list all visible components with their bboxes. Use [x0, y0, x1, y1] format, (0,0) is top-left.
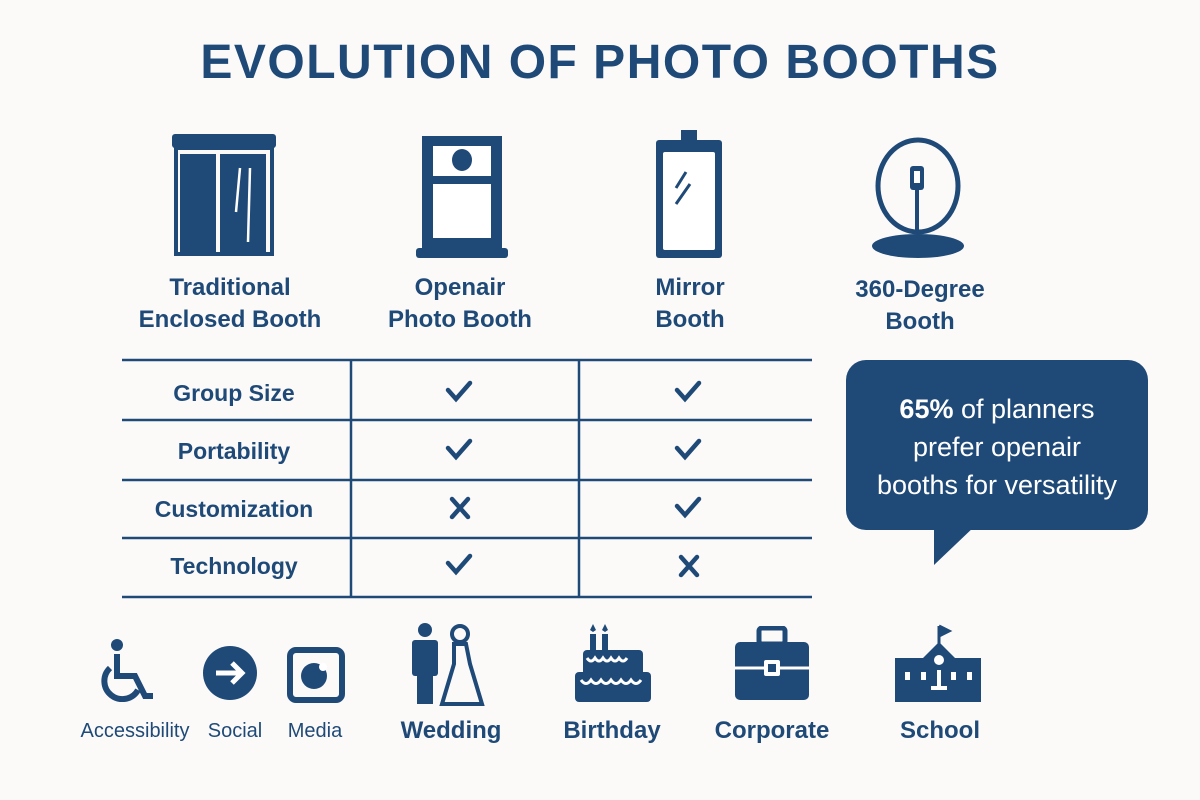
comparison table: Technology [170, 553, 298, 579]
label: wedding: Wedding [401, 717, 501, 744]
icon: wedding [412, 623, 485, 706]
label: birthday: Birthday [563, 717, 661, 744]
icon: traditional booth [172, 134, 276, 256]
comparison table: Customization [155, 496, 313, 522]
label: media: Media [288, 720, 342, 742]
icon: openair booth [416, 136, 508, 258]
label: 360 [855, 276, 985, 335]
label: accessibility: Accessibility [81, 720, 189, 742]
label: openair: Photo Booth [388, 306, 532, 333]
comparison table: Portability [178, 438, 290, 464]
icon: school [895, 624, 981, 702]
label: traditional [139, 274, 321, 333]
label: openair [388, 274, 532, 333]
label: corporate: Corporate [715, 717, 829, 744]
callout: 65% of planners [899, 394, 1095, 424]
icon: birthday [575, 624, 651, 702]
icon: social [203, 646, 257, 700]
label: school: School [900, 717, 980, 744]
label: traditional: Traditional [169, 274, 291, 301]
label: mirror [655, 274, 725, 333]
label: openair: Openair [415, 274, 505, 301]
label: traditional: Enclosed Booth [139, 306, 321, 333]
callout [846, 360, 1148, 565]
label: social: Social [208, 720, 262, 742]
comparison table: Group Size [173, 380, 295, 406]
title: EVOLUTION OF PHOTO BOOTHS [200, 36, 1000, 89]
callout: booths for versatility [877, 470, 1117, 500]
icon: mirror booth [656, 130, 722, 258]
icon: corporate [735, 626, 809, 700]
icon: media [287, 647, 345, 703]
comparison table [122, 358, 812, 598]
label: mirror: Booth [655, 306, 725, 333]
icon: 360 booth [872, 138, 964, 258]
label: 360: 360-Degree [855, 276, 985, 303]
label: mirror: Mirror [655, 274, 725, 301]
label: 360: Booth [885, 308, 955, 335]
callout: prefer openair [913, 432, 1081, 462]
icon: accessibility [101, 639, 153, 702]
